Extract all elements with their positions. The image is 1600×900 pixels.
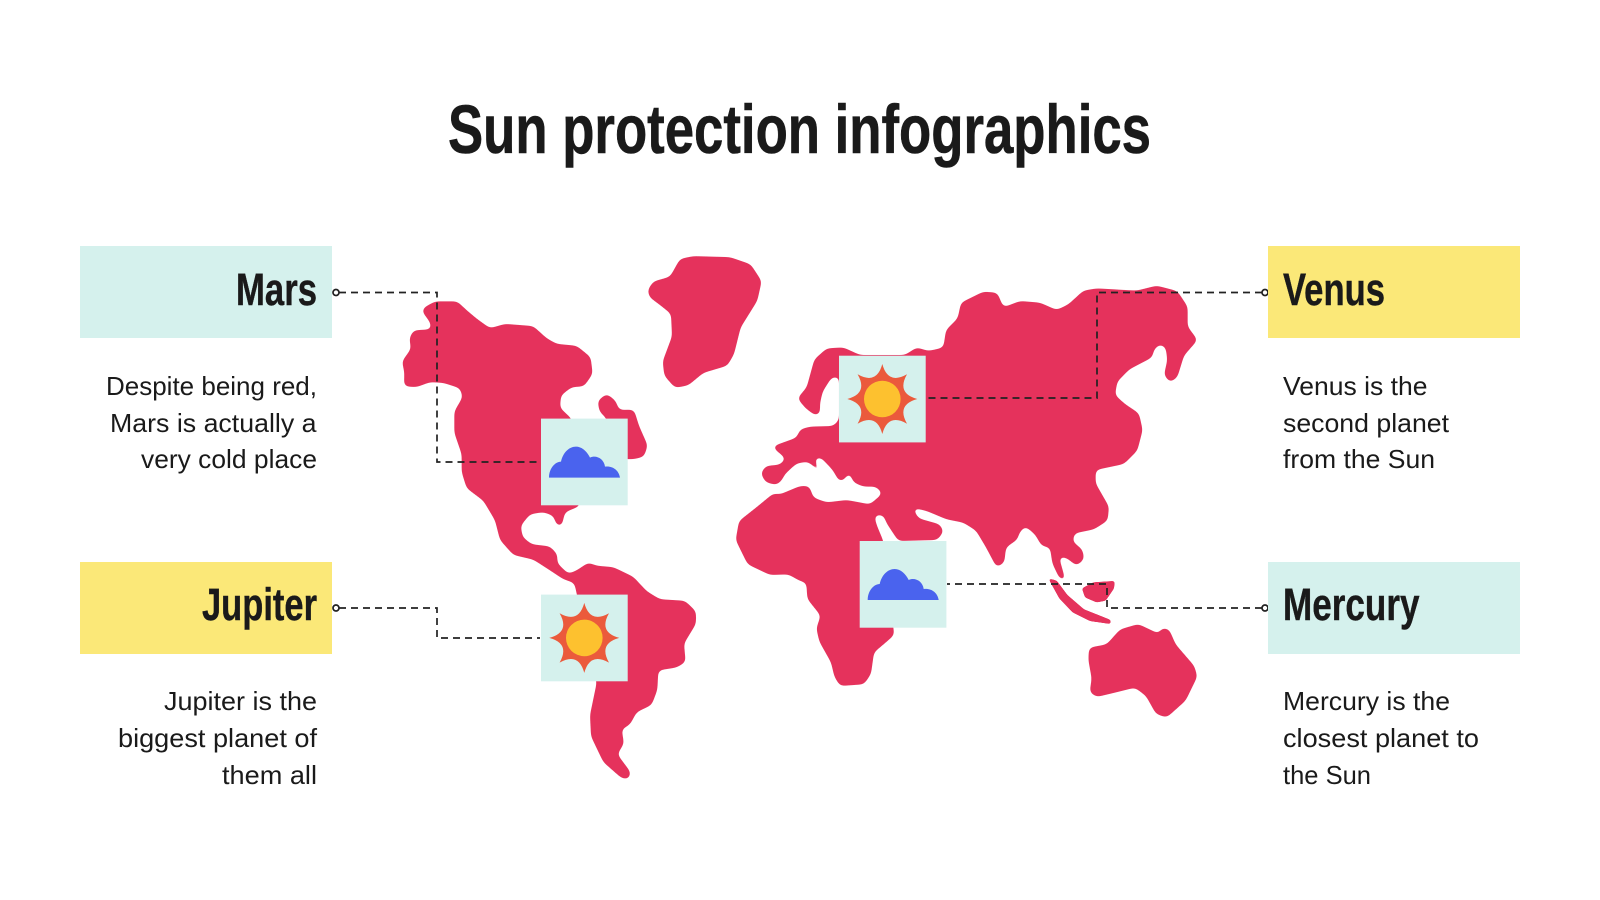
Mars description: Despite being red, (106, 371, 317, 401)
panel: Jupiter (80, 562, 332, 790)
map: Sumatra and Java (1048, 578, 1111, 624)
Mars description (106, 371, 317, 474)
map: islands (1048, 578, 1115, 624)
Mars heading: Mars (236, 264, 317, 315)
Venus heading box (1268, 246, 1520, 338)
Mercury description: closest planet to (1283, 723, 1479, 753)
map: eastern Canada (598, 394, 648, 459)
Jupiter heading: Jupiter (202, 579, 317, 630)
map: Borneo (1082, 581, 1115, 602)
title: Sun protection infographics (448, 91, 1151, 168)
connector: Mercury (947, 584, 1268, 611)
Mercury description (1283, 686, 1479, 790)
Mars description: Mars is actually a (110, 408, 317, 438)
icon tile: sun over Europe (839, 356, 926, 442)
Venus heading: Venus (1283, 264, 1385, 315)
Jupiter description: biggest planet of (118, 723, 318, 753)
icon tile: cloud over North America (541, 419, 628, 505)
Venus description: from the Sun (1283, 444, 1435, 474)
map: Australia (1088, 624, 1197, 718)
Venus description: Venus is the (1283, 371, 1428, 401)
world map (402, 256, 1198, 779)
connector: Jupiter (333, 605, 540, 638)
map: the Americas (402, 301, 696, 779)
map: Eurasia and Africa (736, 286, 1198, 686)
icon tile: sun over South America (541, 595, 628, 681)
map: large land masses (402, 256, 1198, 779)
icon tile: cloud over Africa (860, 541, 946, 628)
panel: Mars (80, 246, 332, 474)
Mercury heading box (1268, 562, 1520, 654)
Mars heading box (80, 246, 332, 338)
panel: Mercury (1268, 562, 1520, 790)
Venus description: second planet (1283, 408, 1450, 438)
connector: Mars (333, 290, 540, 462)
Mercury description: Mercury is the (1283, 686, 1450, 716)
Mars description: very cold place (141, 444, 317, 474)
map: Greenland (648, 256, 762, 388)
Mercury description: the Sun (1283, 760, 1371, 790)
Mercury heading: Mercury (1283, 579, 1420, 630)
connector: Venus (926, 290, 1268, 398)
panel: Venus (1268, 246, 1520, 474)
Jupiter description (118, 686, 318, 790)
Jupiter heading box (80, 562, 332, 654)
Venus description (1283, 371, 1450, 474)
Jupiter description: them all (222, 760, 317, 790)
Jupiter description: Jupiter is the (164, 686, 317, 716)
